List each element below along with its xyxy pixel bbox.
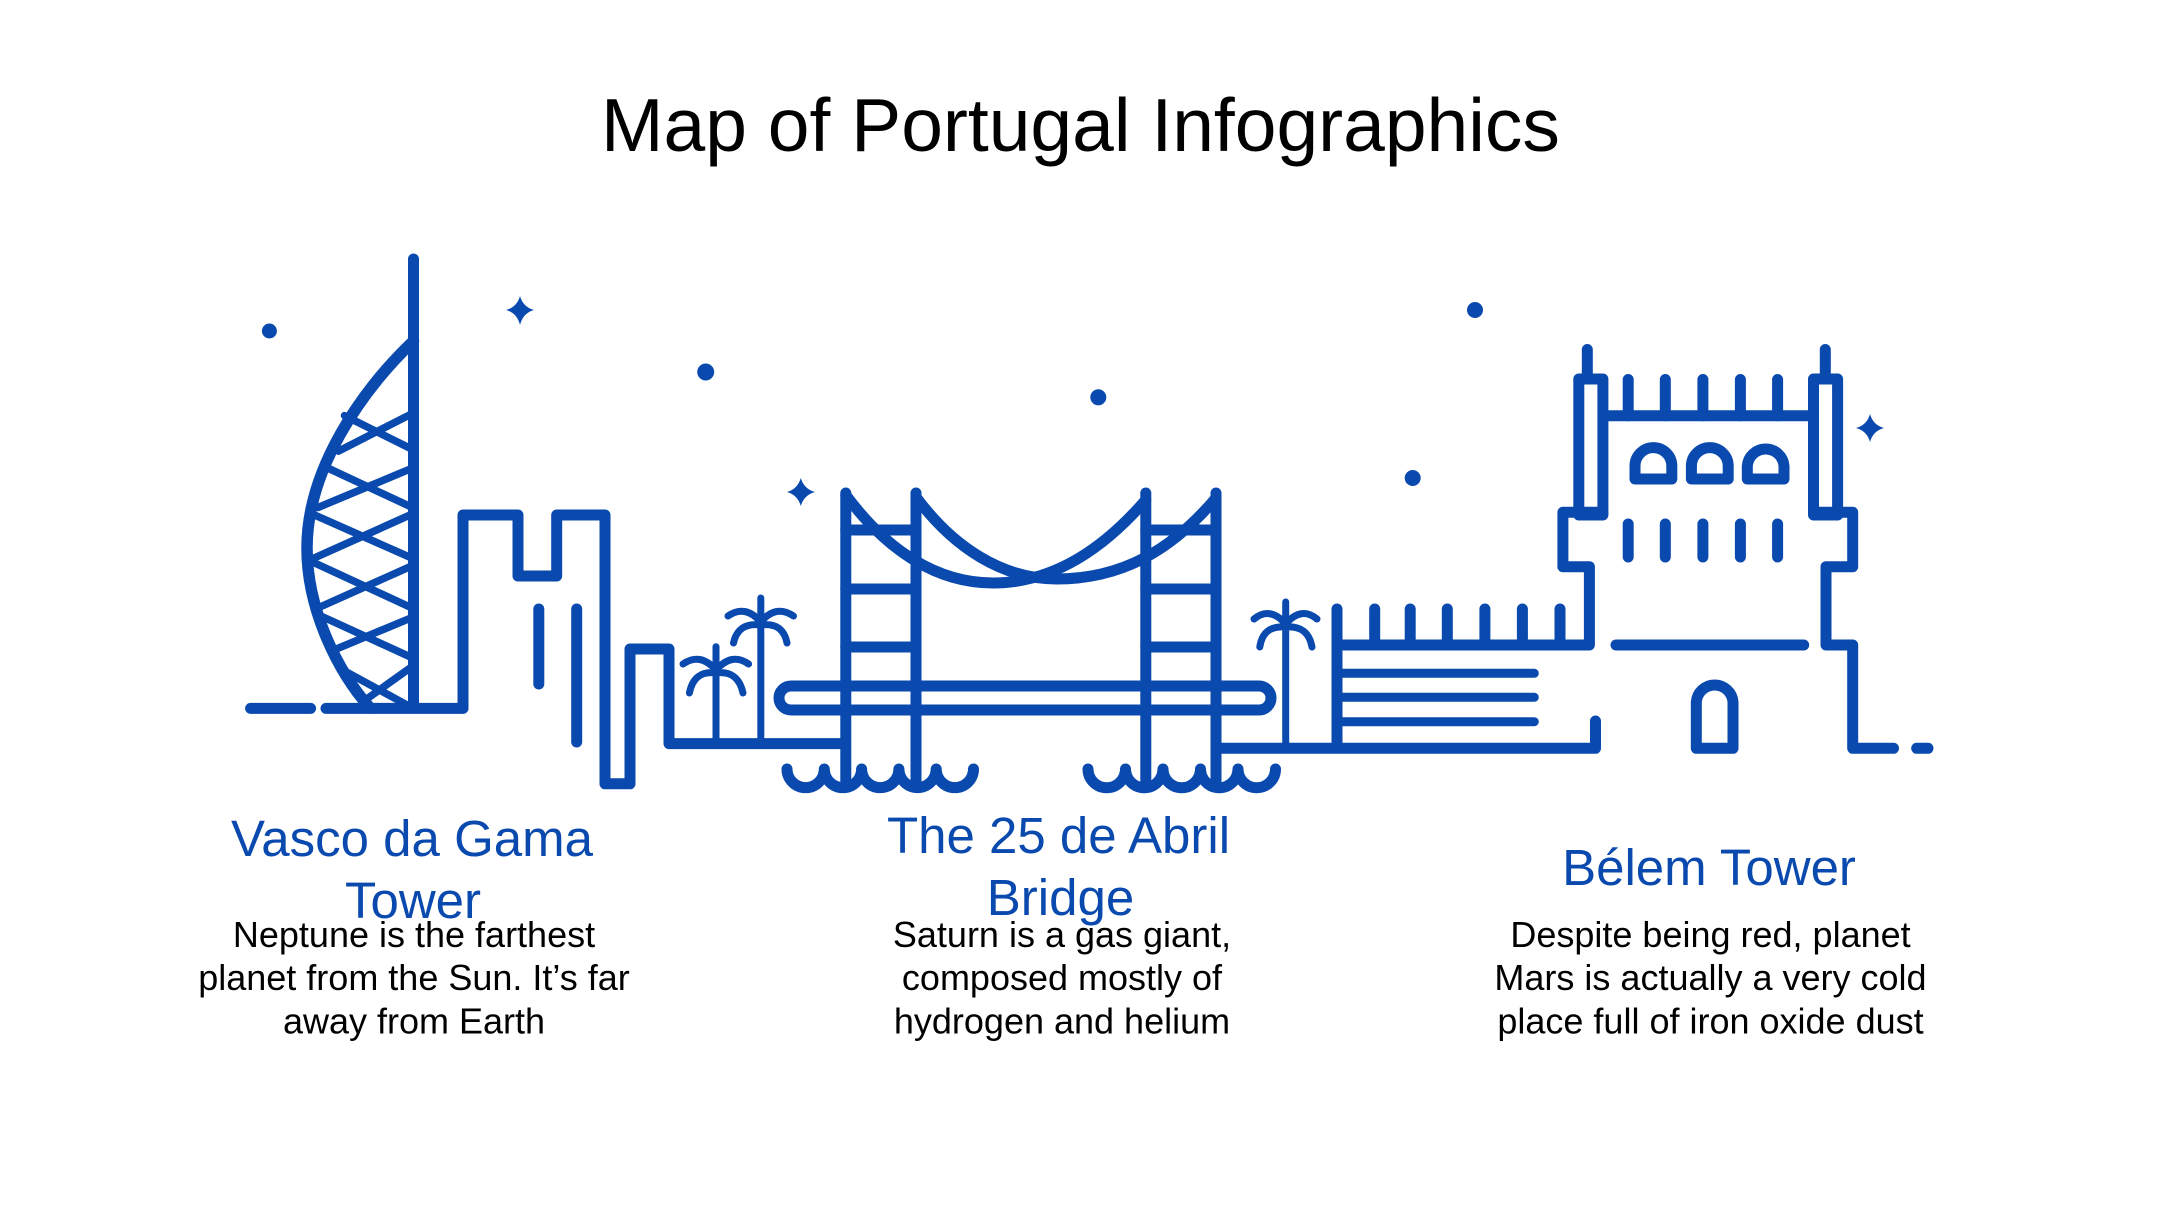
title: Map of Portugal Infographics <box>601 83 1560 167</box>
heading: The 25 de Abril Bridge: Bridge <box>987 869 1134 926</box>
icon: Belem Tower <box>1216 350 1928 748</box>
left skyline buildings <box>251 515 845 784</box>
heading: Vasco da Gama Tower: Tower <box>345 872 481 929</box>
text: Neptune description: planet from the Sun. It’s far <box>198 957 630 998</box>
heading: Vasco da Gama Tower: Vasco da Gama <box>231 810 594 867</box>
text: Neptune description: Neptune is the farthest <box>233 914 595 955</box>
text: Saturn description: Saturn is a gas giant, <box>893 914 1231 955</box>
skyline illustration <box>251 259 1928 788</box>
text: Saturn description: hydrogen and helium <box>894 1000 1230 1041</box>
text: Mars description: place full of iron oxide dust <box>1497 1000 1924 1041</box>
decoration: dots and stars <box>262 296 1884 506</box>
text: Mars description: Mars is actually a very cold <box>1494 957 1927 998</box>
heading: Belem Tower: Bélem Tower <box>1562 839 1856 896</box>
icon: 25 de Abril Bridge <box>779 493 1276 788</box>
icon: palm trees left <box>683 598 794 743</box>
text: Saturn description: composed mostly of <box>902 957 1223 998</box>
text: Mars description: Despite being red, planet <box>1510 914 1911 955</box>
icon: palm tree right <box>1254 602 1317 746</box>
icon: Vasco da Gama Tower <box>307 259 414 708</box>
heading: The 25 de Abril Bridge: The 25 de Abril <box>887 807 1230 864</box>
text: Neptune description: away from Earth <box>283 1000 545 1041</box>
